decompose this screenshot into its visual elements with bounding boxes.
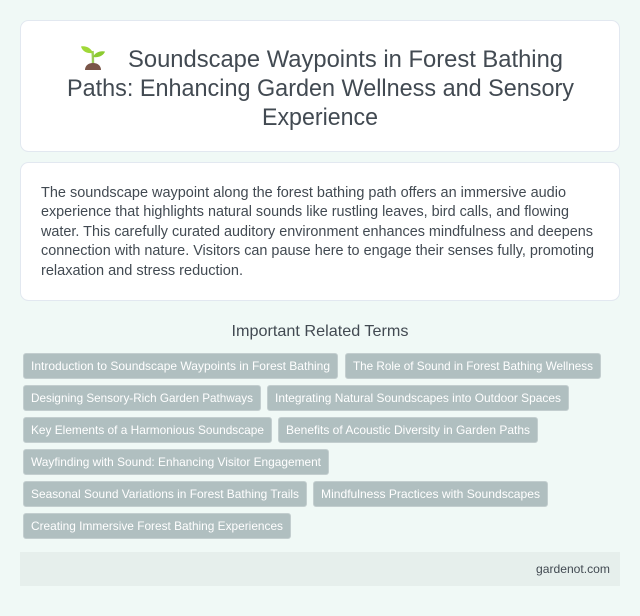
description text: relaxation and stress reduction. [41, 263, 243, 279]
tag [24, 482, 306, 506]
title: Paths: Enhancing Garden Wellness and Sensory [67, 75, 574, 102]
footer [20, 552, 620, 586]
description text [40, 185, 594, 279]
tag: Wayfinding with Sound: Enhancing Visitor Engagement [31, 455, 322, 469]
tag: Key Elements of a Harmonious Soundscape [31, 423, 264, 437]
tag [24, 418, 272, 442]
heading: important related terms: Important Related Terms [232, 323, 408, 340]
title: Experience [262, 104, 378, 131]
tag: Designing Sensory-Rich Garden Pathways [31, 391, 253, 405]
panel: description [20, 162, 620, 300]
title: Soundscape Waypoints in Forest Bathing [128, 46, 563, 73]
tag: Integrating Natural Soundscapes into Outdoor Spaces [275, 391, 561, 405]
tag [24, 450, 328, 474]
tag: Benefits of Acoustic Diversity in Garden Paths [286, 423, 530, 437]
tag [24, 386, 260, 410]
title [67, 46, 574, 131]
tag [314, 482, 548, 506]
icon: seedling [81, 46, 105, 70]
panel: title card [20, 20, 620, 152]
tag list [24, 354, 600, 538]
tag: Introduction to Soundscape Waypoints in Forest Bathing [31, 359, 330, 373]
description text: The soundscape waypoint along the forest bathing path offers an immersive audio [41, 185, 566, 201]
tag: Seasonal Sound Variations in Forest Bathing Trails [31, 487, 299, 501]
tag [346, 354, 600, 378]
tag: Creating Immersive Forest Bathing Experiences [31, 519, 283, 533]
description text: connection with nature. Visitors can pause here to engage their senses fully, promoting [41, 243, 594, 259]
tag: Mindfulness Practices with Soundscapes [321, 487, 540, 501]
tag [278, 418, 538, 442]
description text: experience that highlights natural sounds like rustling leaves, bird calls, and flowing [41, 204, 569, 220]
tag [24, 514, 290, 538]
tag [24, 354, 338, 378]
footer: gardenot.com [536, 562, 610, 576]
tag [268, 386, 568, 410]
tag: The Role of Sound in Forest Bathing Wellness [353, 359, 593, 373]
description text: water. This carefully curated auditory environment enhances mindfulness and deepens [40, 224, 593, 240]
